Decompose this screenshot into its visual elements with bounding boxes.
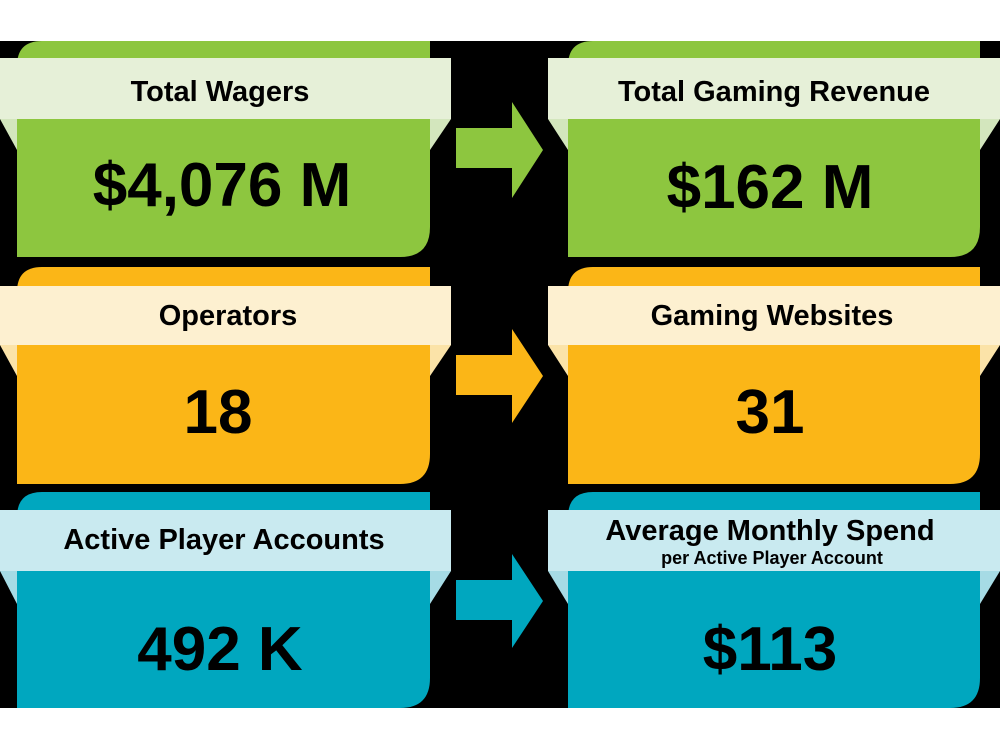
heading: Active Player Accounts bbox=[63, 524, 385, 556]
heading: Operators bbox=[159, 300, 297, 332]
heading: Gaming Websites bbox=[651, 300, 893, 332]
value: $4,076 M bbox=[93, 151, 351, 220]
heading: Average Monthly Spend bbox=[605, 515, 935, 547]
value: 31 bbox=[736, 378, 804, 447]
arrow: orange bbox=[456, 329, 543, 423]
arrow: green bbox=[456, 102, 543, 198]
panel: operators bbox=[0, 267, 451, 484]
subheading: per Active Player Account bbox=[661, 548, 883, 568]
heading: Total Wagers bbox=[131, 76, 309, 108]
panel: total wagers bbox=[0, 41, 451, 257]
arrow: teal bbox=[456, 554, 543, 648]
value: $113 bbox=[703, 615, 837, 684]
panel: average monthly spend bbox=[548, 492, 1000, 708]
value: 18 bbox=[184, 378, 252, 447]
panel: gaming websites bbox=[548, 267, 1000, 484]
panel: total gaming revenue bbox=[548, 41, 1000, 257]
value: $162 M bbox=[667, 153, 873, 222]
value: 492 K bbox=[137, 615, 303, 684]
heading: Total Gaming Revenue bbox=[618, 76, 930, 108]
panel: active player accounts bbox=[0, 492, 451, 708]
